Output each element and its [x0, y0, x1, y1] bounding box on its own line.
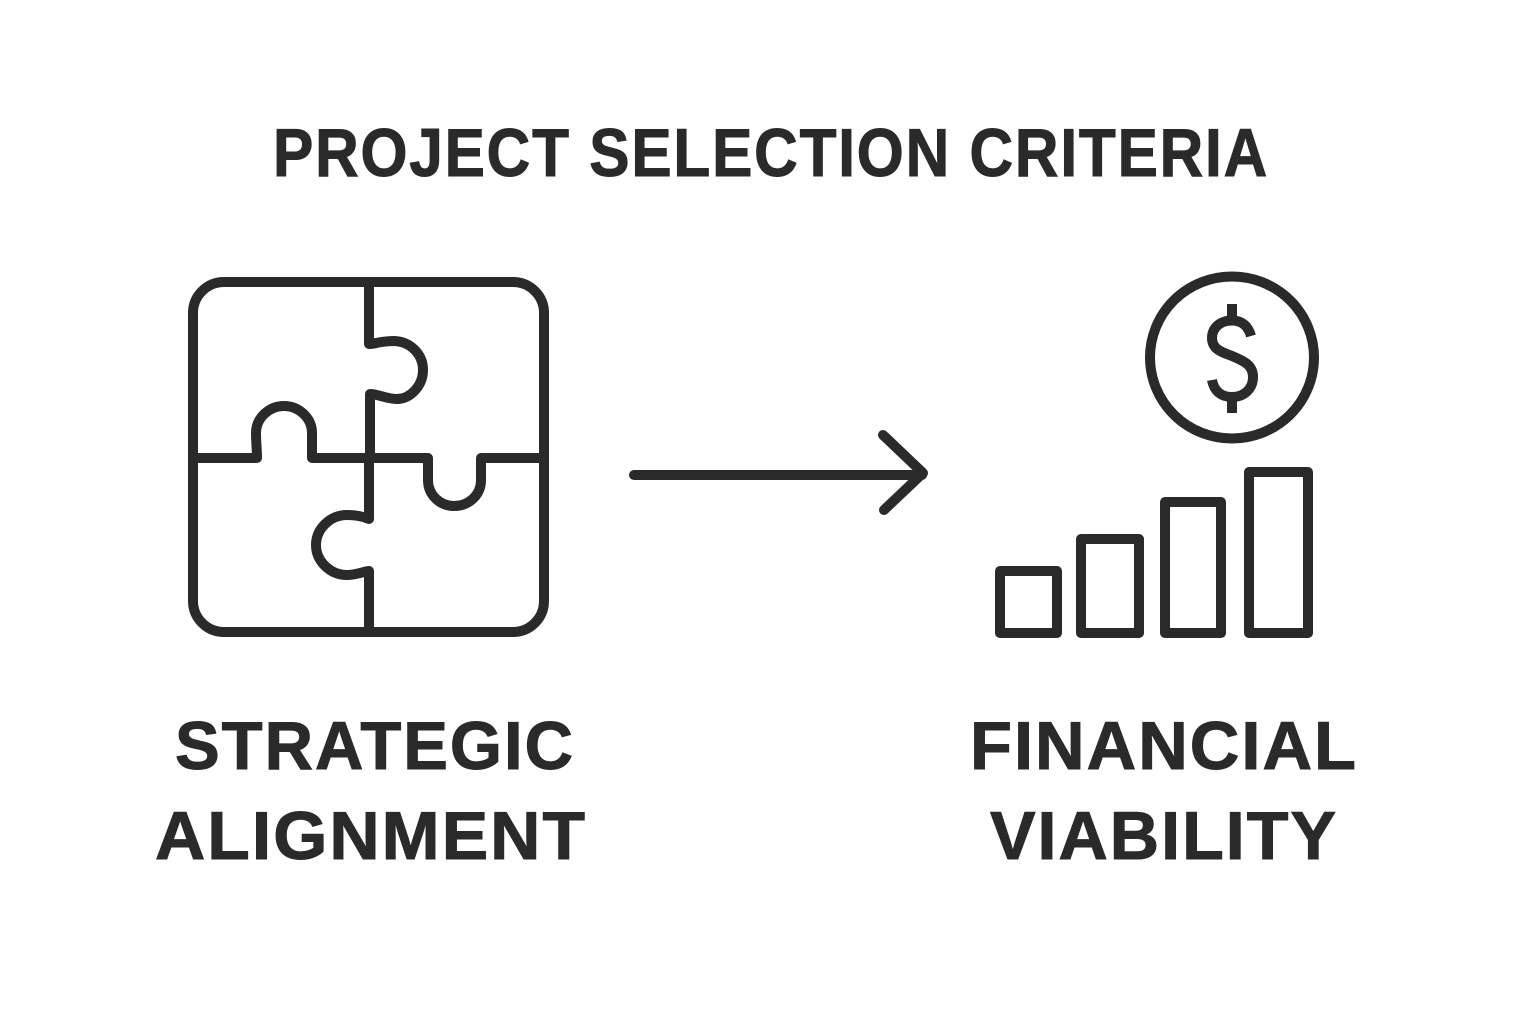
icon: dollar coin [1150, 276, 1314, 438]
label: strategic alignment: STRATEGIC [175, 708, 575, 784]
label: strategic alignment [155, 708, 587, 874]
label: financial viability: FINANCIAL [970, 708, 1358, 784]
arrow [634, 435, 923, 510]
title: PROJECT SELECTION CRITERIA [273, 115, 1269, 191]
label: financial viability [970, 708, 1358, 874]
icon: puzzle [193, 282, 544, 632]
icon: bar chart [1000, 472, 1308, 633]
label: financial viability: VIABILITY [990, 798, 1338, 874]
label: strategic alignment: ALIGNMENT [155, 798, 587, 874]
